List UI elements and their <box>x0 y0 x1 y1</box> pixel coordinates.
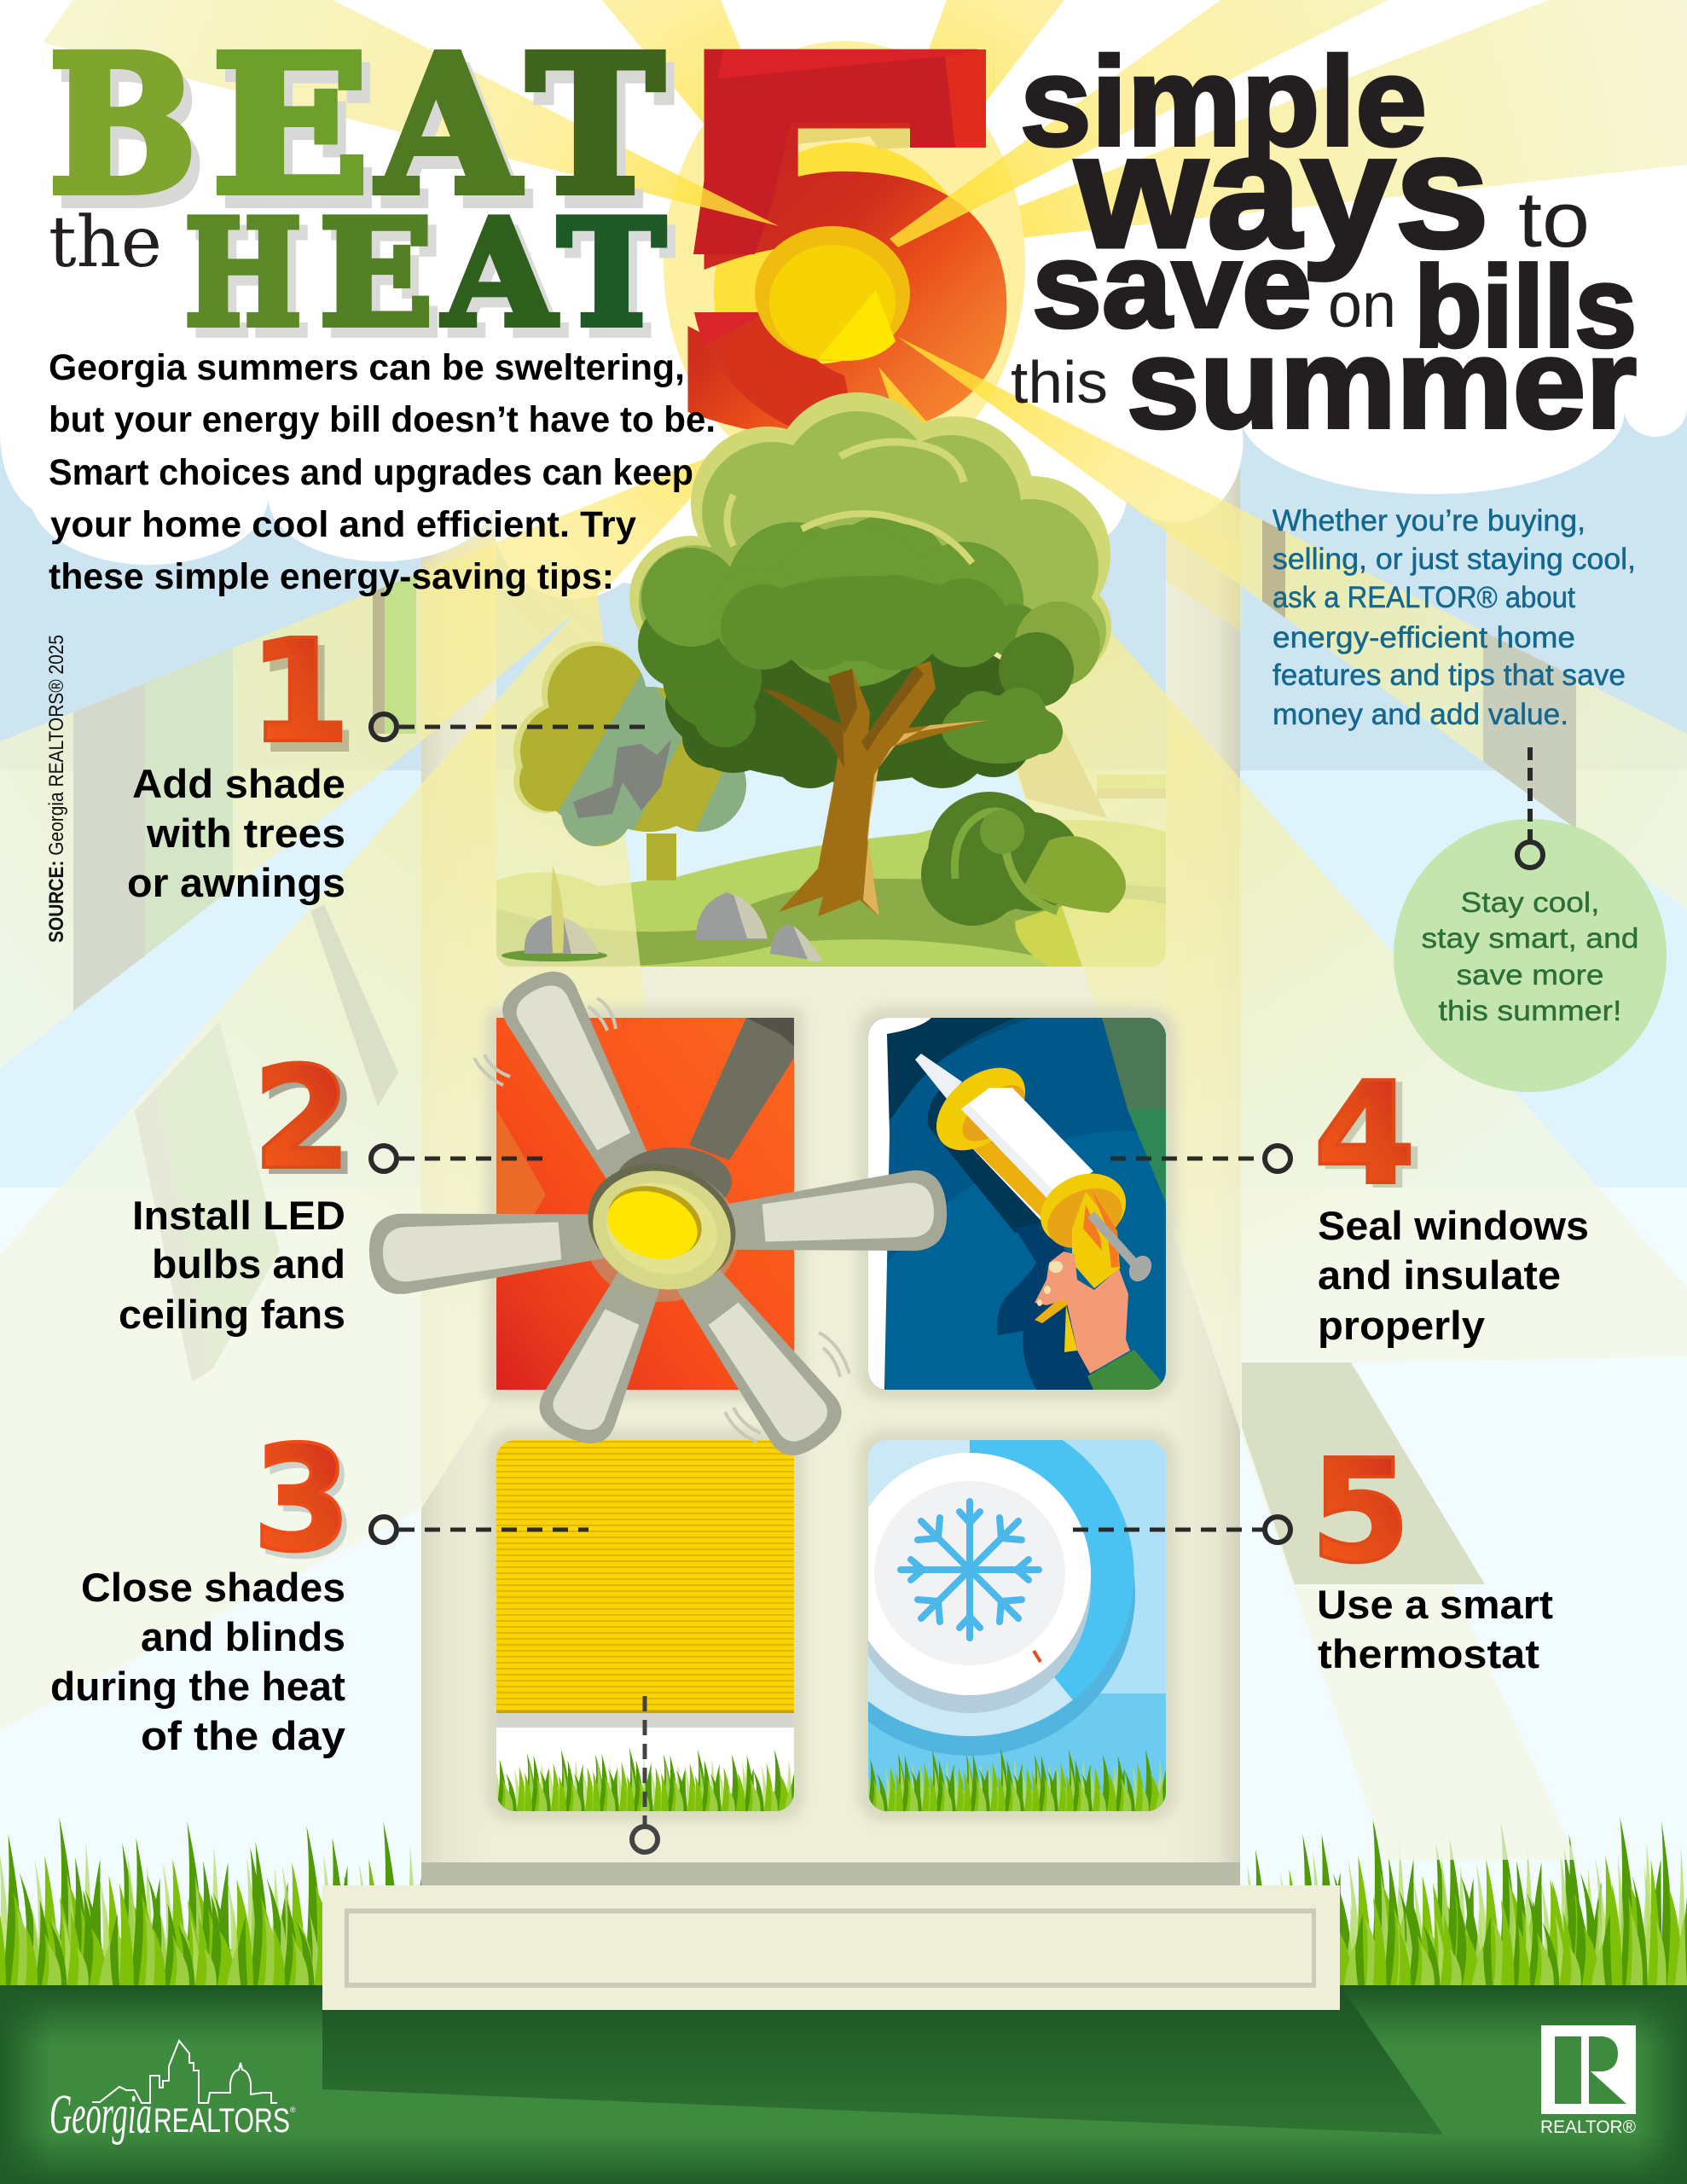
callout bubble: Stay cool, <box>1460 886 1600 918</box>
tree crown right lobes <box>1015 601 1100 687</box>
realtor advice paragraph: Whether you’re buying, <box>1272 504 1586 537</box>
realtor advice paragraph: ask a REALTOR® about <box>1272 581 1575 614</box>
ray reflections right <box>1262 520 1576 828</box>
step 3: Close shades <box>81 1565 345 1610</box>
callout bubble: save more <box>1457 959 1603 990</box>
headline: 5 simple ways to save on bills this summer: summer <box>1127 311 1637 455</box>
step 2: bulbs and <box>152 1241 345 1287</box>
step 4: properly <box>1318 1303 1485 1348</box>
numeral 1: 1 <box>255 619 357 784</box>
sun halo <box>664 41 1025 488</box>
step 3: of the day <box>141 1713 345 1758</box>
headline: 5 simple ways to save on bills this summer: bills <box>1414 242 1637 371</box>
step 5 <box>1073 1430 1553 1676</box>
intro paragraph: Georgia summers can be sweltering, <box>49 347 685 388</box>
headline: 5 simple ways to save on bills this summer: ways <box>1075 101 1489 282</box>
intro paragraph: these simple energy-saving tips: <box>49 556 614 597</box>
ceiling fan <box>366 961 950 1467</box>
headline: 5 simple ways to save on bills this summer: simple <box>1020 32 1427 172</box>
step 1 <box>127 610 648 905</box>
logo: Georgia REALTORS <box>49 2041 296 2146</box>
title: BEAT: B <box>57 27 206 249</box>
tree crown rim <box>629 392 1111 677</box>
headline: 5 simple ways to save on bills this summer <box>1011 32 1637 455</box>
numeral 3: 3 <box>252 1415 351 1584</box>
callout bubble <box>1394 747 1667 1092</box>
logo: Georgia REALTORS: REALTORS <box>154 2102 290 2140</box>
source note: SOURCE: Georgia REALTORS® 2025 <box>45 635 68 943</box>
intro paragraph <box>49 347 716 597</box>
fan blade upper left <box>493 961 673 1205</box>
caulk gun <box>915 1051 1156 1352</box>
ground <box>0 1985 1687 2184</box>
fan blade right <box>710 1168 950 1269</box>
title: BEAT: T <box>536 27 672 249</box>
tree <box>629 392 1111 916</box>
fan blade left <box>366 1195 614 1297</box>
step 2: Install LED <box>132 1193 345 1238</box>
title: HEAT: E <box>319 188 433 359</box>
title: BEAT: A <box>376 15 520 236</box>
tree crown mid <box>712 515 1023 687</box>
headline: 5 simple ways to save on bills this summer: to <box>1518 177 1590 264</box>
title: HEAT <box>184 188 674 369</box>
fan blade lower left <box>530 1262 675 1454</box>
numeral 4: 4 <box>1313 1052 1416 1216</box>
realtor advice paragraph: energy-efficient home <box>1272 621 1575 654</box>
title: BEAT: T <box>527 15 664 236</box>
logo: Georgia REALTORS: Georgia <box>49 2083 152 2146</box>
step 4 <box>1110 1052 1589 1348</box>
step 3: and blinds <box>141 1614 345 1659</box>
back tree in panel 1 <box>513 642 746 880</box>
step 1: or awnings <box>127 860 345 905</box>
panel 2: orange fan window <box>486 1008 804 1400</box>
logo: REALTOR block: REALTOR® <box>1540 2117 1637 2137</box>
numeral 3: 3 <box>258 1421 357 1590</box>
step 3: during the heat <box>50 1664 345 1709</box>
logo: REALTOR block <box>1540 2025 1637 2137</box>
panel 1: tree scene background <box>496 502 1166 967</box>
title: BEAT: A <box>385 27 529 249</box>
yellow light on the frame <box>421 512 1242 1509</box>
numeral 2: 2 <box>252 1037 351 1200</box>
panel 3: closed blinds window <box>486 1430 804 1821</box>
blinds callout connector <box>632 1696 658 1852</box>
numeral 1: 1 <box>248 610 351 775</box>
tree trunk <box>762 661 989 916</box>
title: BEAT: B <box>49 15 197 236</box>
callout bubble: stay smart, and <box>1421 922 1639 954</box>
lawn grass beside the house <box>0 1817 1687 1985</box>
realtor advice paragraph: selling, or just staying cool, <box>1272 543 1636 576</box>
ray reflections left upper <box>73 575 416 1012</box>
sun <box>755 226 910 361</box>
headline: 5 simple ways to save on bills this summer: save <box>1032 218 1312 353</box>
title: HEAT: T <box>566 198 674 369</box>
headline: 5 simple ways to save on bills this summer: this <box>1011 349 1108 415</box>
intro paragraph: Smart choices and upgrades can keep <box>49 452 693 493</box>
title: HEAT: A <box>442 188 557 359</box>
step 4: Seal windows <box>1318 1203 1589 1248</box>
window frame of the house <box>421 341 1240 1886</box>
callout bubble: this summer! <box>1438 995 1622 1026</box>
step 2 <box>119 1037 550 1337</box>
panel 4: caulk gun window <box>858 1008 1176 1400</box>
fan motion lines <box>474 998 849 1442</box>
tree crown light <box>639 411 1106 676</box>
title: HEAT: E <box>328 198 442 369</box>
sill <box>322 1885 1340 2010</box>
title: BEAT: E <box>220 27 378 249</box>
step 1: Add shade <box>132 761 345 806</box>
panel 5: thermostat window <box>804 1412 1176 1821</box>
logo: Georgia REALTORS: ® <box>290 2106 296 2114</box>
tree crown shadow <box>665 625 1033 788</box>
numeral 4: 4 <box>1320 1055 1423 1219</box>
step 2: ceiling fans <box>119 1292 345 1337</box>
hand holding gun <box>1035 1252 1162 1390</box>
title: HEAT: H <box>184 188 302 359</box>
rocks in panel 1 <box>501 866 823 961</box>
title: BEAT <box>49 15 672 249</box>
title: the: the <box>49 202 162 283</box>
step 3 <box>50 1415 588 1758</box>
step 1: with trees <box>146 810 345 856</box>
numeral 2: 2 <box>259 1042 358 1205</box>
intro paragraph: but your energy bill doesn’t have to be. <box>49 399 716 440</box>
fan motor hub <box>572 1145 751 1307</box>
rolling hills <box>496 817 1166 967</box>
step 5: Use a smart <box>1317 1582 1553 1627</box>
ray reflections left lower <box>135 904 398 1382</box>
step 5: thermostat <box>1318 1631 1539 1676</box>
intro paragraph: your home cool and efficient. Try <box>50 504 636 545</box>
realtor advice paragraph: money and add value. <box>1272 698 1568 731</box>
headline: 5 simple ways to save on bills this summer: on <box>1328 270 1396 340</box>
tree crown lower mid <box>721 575 1042 671</box>
tree crown left lobes <box>638 600 762 747</box>
title: HEAT: H <box>193 198 310 369</box>
fan blade lower right <box>661 1249 852 1467</box>
bush <box>921 792 1126 926</box>
numeral 5: 5 <box>1310 1430 1411 1594</box>
ray band on the lower right <box>1242 1362 1485 1584</box>
title: HEAT: A <box>450 198 565 369</box>
white cloud <box>0 0 1687 614</box>
sun rays behind the number <box>602 0 1687 290</box>
step 4: and insulate <box>1318 1252 1561 1298</box>
title: HEAT: T <box>558 188 665 359</box>
reflected window bands <box>1017 728 1166 818</box>
realtor advice paragraph: features and tips that save <box>1272 659 1626 692</box>
realtor advice paragraph <box>1272 504 1636 731</box>
title: BEAT: E <box>212 15 369 236</box>
snowflake icon <box>901 1502 1039 1638</box>
